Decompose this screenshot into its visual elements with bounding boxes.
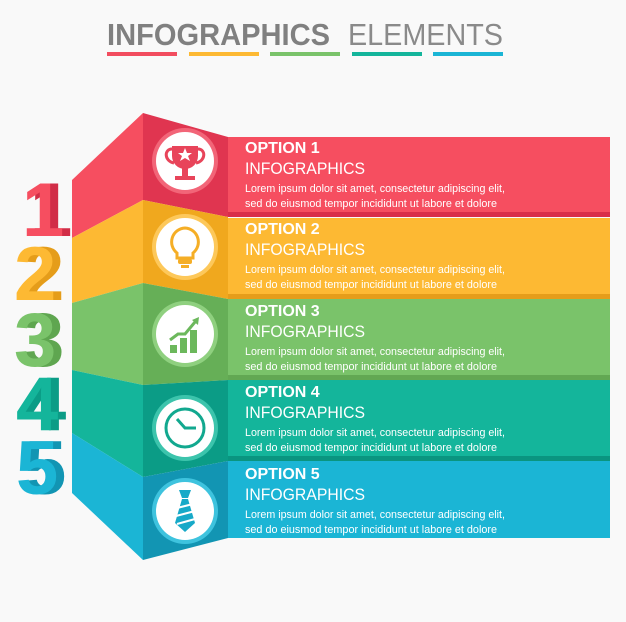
icon: clock bbox=[152, 395, 218, 461]
number 2: 2 bbox=[14, 232, 56, 317]
band 2 bbox=[14, 200, 610, 317]
icon: light bulb bbox=[152, 214, 218, 280]
text 5: sed do eiusmod tempor incididunt ut labore et dolore bbox=[245, 524, 497, 536]
text 1: Lorem ipsum dolor sit amet, consectetur adipiscing elit, bbox=[245, 183, 505, 195]
icon: trophy bbox=[152, 128, 218, 194]
number 3: 3 bbox=[14, 298, 56, 383]
text 1 bbox=[245, 140, 505, 210]
text 1: INFOGRAPHICS bbox=[245, 159, 365, 178]
number 4: 4 bbox=[24, 362, 66, 447]
text 1: OPTION 1 bbox=[245, 140, 320, 157]
text 4: INFOGRAPHICS bbox=[245, 403, 365, 422]
number 1: 1 bbox=[30, 168, 72, 253]
text 4: OPTION 4 bbox=[245, 384, 320, 401]
band 5 bbox=[16, 426, 610, 560]
number 3: 3 bbox=[22, 298, 64, 383]
text 5: OPTION 5 bbox=[245, 466, 320, 483]
band 1 bbox=[22, 113, 610, 253]
text 2: OPTION 2 bbox=[245, 221, 320, 238]
text 2: Lorem ipsum dolor sit amet, consectetur adipiscing elit, bbox=[245, 264, 505, 276]
title: ELEMENTS bbox=[348, 17, 503, 52]
text 3: INFOGRAPHICS bbox=[245, 322, 365, 341]
text 4 bbox=[245, 384, 505, 454]
text 3: OPTION 3 bbox=[245, 303, 320, 320]
text 3: sed do eiusmod tempor incididunt ut labore et dolore bbox=[245, 361, 497, 373]
text 5 bbox=[245, 466, 505, 536]
icon: growth chart bbox=[152, 301, 218, 367]
text 3 bbox=[245, 303, 505, 373]
number 5: 5 bbox=[16, 426, 58, 511]
title: INFOGRAPHICS bbox=[107, 17, 330, 52]
number 5: 5 bbox=[24, 426, 66, 511]
text 1: sed do eiusmod tempor incididunt ut labore et dolore bbox=[245, 198, 497, 210]
title bbox=[107, 17, 503, 56]
text 2: INFOGRAPHICS bbox=[245, 240, 365, 259]
number 4: 4 bbox=[16, 362, 58, 447]
band 4 bbox=[16, 362, 610, 477]
text 5: INFOGRAPHICS bbox=[245, 485, 365, 504]
text 2 bbox=[245, 221, 505, 291]
text 3: Lorem ipsum dolor sit amet, consectetur adipiscing elit, bbox=[245, 346, 505, 358]
number 1: 1 bbox=[22, 168, 64, 253]
text 4: Lorem ipsum dolor sit amet, consectetur adipiscing elit, bbox=[245, 427, 505, 439]
text 4: sed do eiusmod tempor incididunt ut labore et dolore bbox=[245, 442, 497, 454]
number 2: 2 bbox=[22, 232, 64, 317]
text 5: Lorem ipsum dolor sit amet, consectetur adipiscing elit, bbox=[245, 509, 505, 521]
band 3 bbox=[14, 283, 610, 385]
icon: tie bbox=[152, 478, 218, 544]
text 2: sed do eiusmod tempor incididunt ut labore et dolore bbox=[245, 279, 497, 291]
